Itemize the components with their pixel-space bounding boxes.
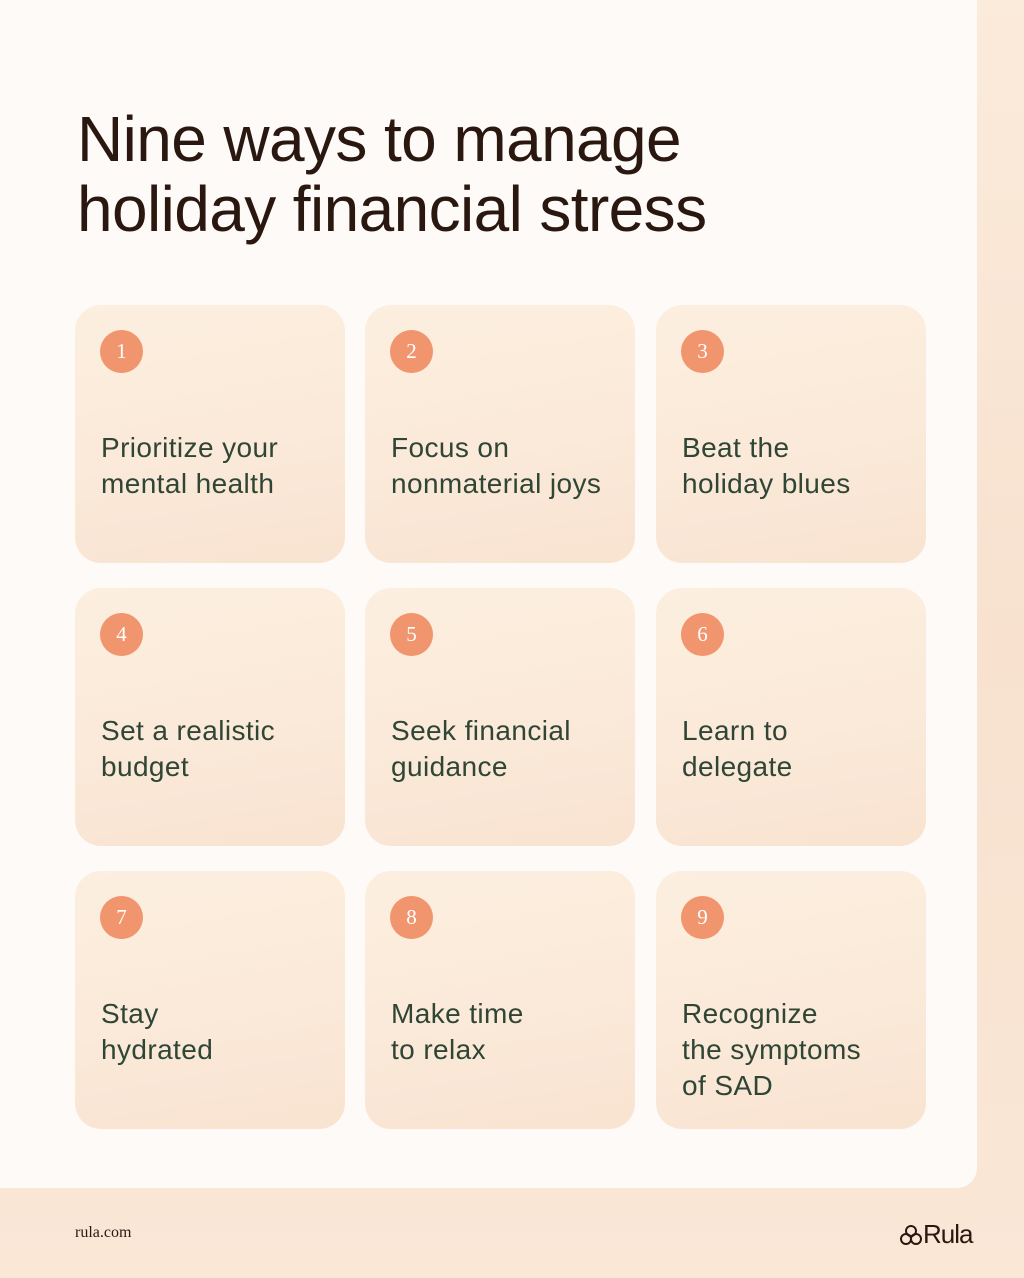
card 3: Beat the bbox=[682, 432, 790, 463]
card 4: Set a realistic bbox=[101, 715, 275, 746]
footer url: rula.com bbox=[75, 1224, 131, 1241]
card 7 bbox=[75, 871, 345, 1129]
card 8 bbox=[365, 871, 635, 1129]
card 9: 9 bbox=[697, 905, 708, 929]
card 4 bbox=[75, 588, 345, 846]
card 3: 3 bbox=[697, 339, 708, 363]
card 9: the symptoms bbox=[682, 1034, 861, 1065]
card 9: Recognize bbox=[682, 998, 818, 1029]
card 6: Learn to bbox=[682, 715, 788, 746]
card 5: guidance bbox=[391, 751, 508, 782]
card 8: Make time bbox=[391, 998, 524, 1029]
card 6: 6 bbox=[697, 622, 708, 646]
card 9: of SAD bbox=[682, 1070, 773, 1101]
card 5 bbox=[365, 588, 635, 846]
card 1: mental health bbox=[101, 468, 274, 499]
card 1: Prioritize your bbox=[101, 432, 278, 463]
card 4: budget bbox=[101, 751, 189, 782]
card 2: Focus on bbox=[391, 432, 509, 463]
card 2: 2 bbox=[406, 339, 417, 363]
card 6: delegate bbox=[682, 751, 793, 782]
card 3 bbox=[656, 305, 926, 563]
card 5: Seek financial bbox=[391, 715, 571, 746]
logo: Rula bbox=[923, 1219, 972, 1249]
card 7: hydrated bbox=[101, 1034, 213, 1065]
card 6 bbox=[656, 588, 926, 846]
card 8: 8 bbox=[406, 905, 417, 929]
card 9 bbox=[656, 871, 926, 1129]
logo bbox=[900, 1219, 974, 1249]
card 7: Stay bbox=[101, 998, 159, 1029]
card 8: to relax bbox=[391, 1034, 486, 1065]
title bbox=[77, 103, 706, 245]
card 1: 1 bbox=[116, 339, 127, 363]
title: holiday financial stress bbox=[77, 173, 706, 245]
card 1 bbox=[75, 305, 345, 563]
card 3: holiday blues bbox=[682, 468, 851, 499]
card 5: 5 bbox=[406, 622, 417, 646]
card 2 bbox=[365, 305, 635, 563]
title: Nine ways to manage bbox=[77, 103, 681, 175]
card 7: 7 bbox=[116, 905, 127, 929]
card 2: nonmaterial joys bbox=[391, 468, 601, 499]
card 4: 4 bbox=[116, 622, 127, 646]
